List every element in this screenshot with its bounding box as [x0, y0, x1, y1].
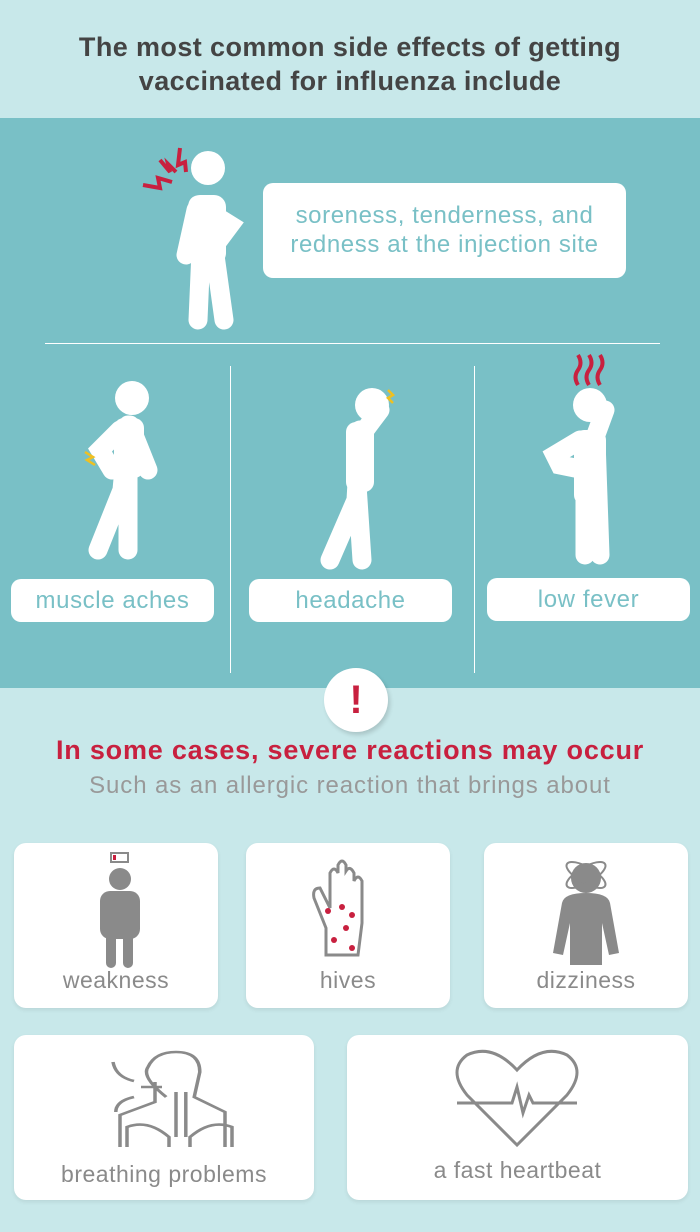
label: low fever: low fever — [538, 586, 639, 613]
callout: injection site: redness at the injection site — [290, 231, 599, 258]
heading: severe reactions: In some cases, severe reactions may occur — [56, 735, 644, 765]
icon: exclamation: ! — [349, 678, 363, 722]
panel: hives: hives — [320, 967, 376, 993]
panel: dizziness: dizziness — [536, 967, 636, 993]
title: vaccinated for influenza include — [139, 66, 561, 96]
label: headache: headache — [295, 587, 406, 614]
panel: weakness: weakness — [63, 967, 169, 993]
panel: common side effects — [0, 118, 700, 688]
panel: weakness — [14, 843, 218, 1008]
callout: injection site — [263, 183, 626, 278]
subtitle: Such as an allergic reaction that brings about — [89, 772, 611, 799]
label: muscle aches — [11, 579, 214, 622]
panel: fast heartbeat — [347, 1035, 688, 1200]
callout: injection site: soreness, tenderness, and — [296, 202, 593, 229]
panel: fast heartbeat: a fast heartbeat — [434, 1157, 601, 1183]
icon: figures — [84, 148, 614, 570]
label: muscle aches: muscle aches — [36, 587, 189, 614]
panel: breathing problems: breathing problems — [61, 1161, 267, 1187]
title: The most common side effects of getting — [79, 32, 621, 62]
label: headache — [249, 579, 452, 622]
panel: dizziness — [484, 843, 688, 1008]
icon: exclamation — [324, 668, 388, 732]
panel: hives — [246, 843, 450, 1008]
panel: breathing problems — [14, 1035, 314, 1200]
title — [79, 32, 621, 96]
label: low fever — [487, 578, 690, 621]
